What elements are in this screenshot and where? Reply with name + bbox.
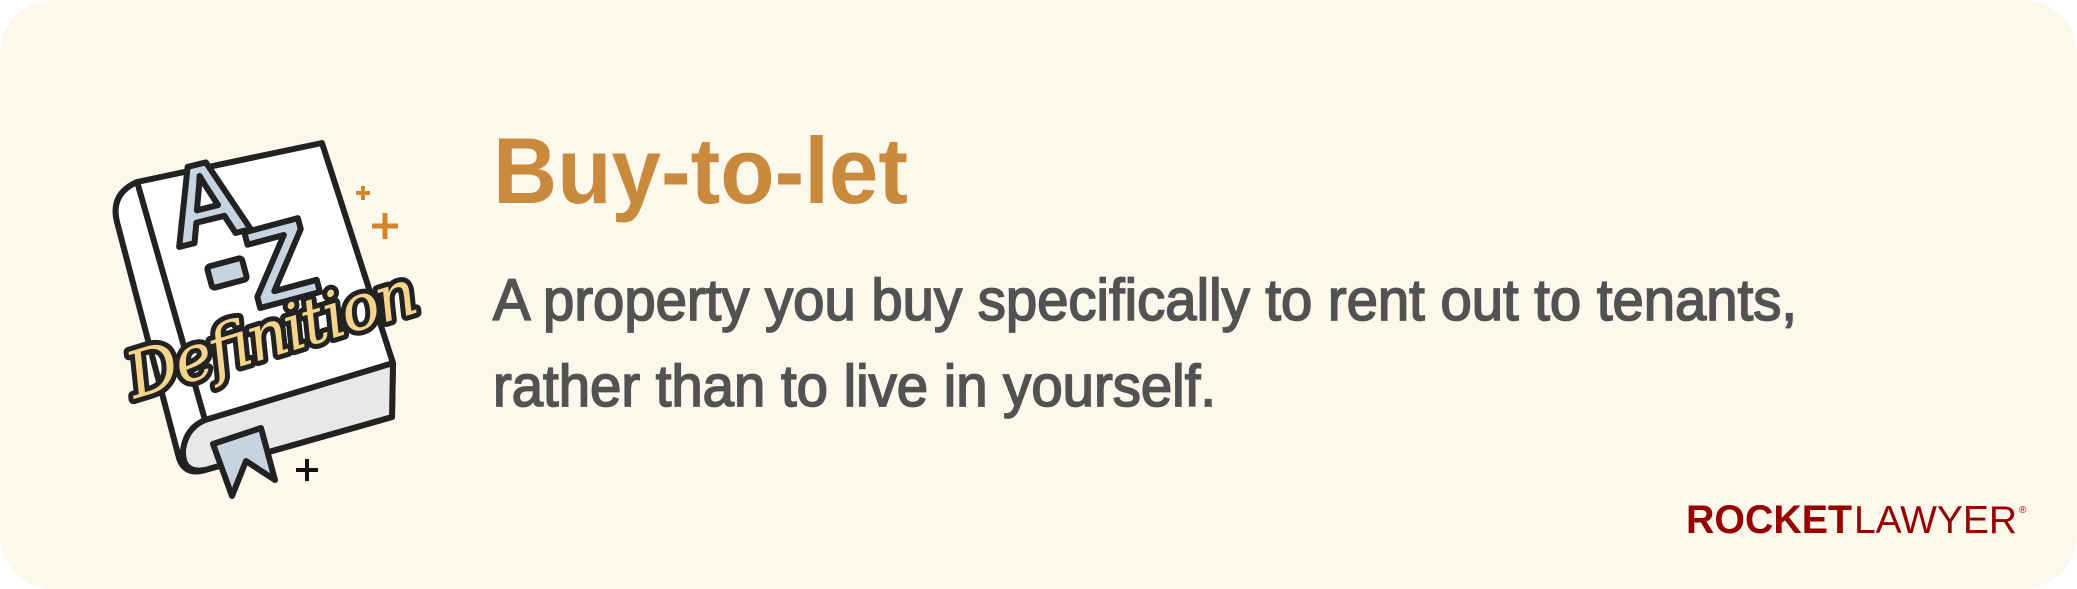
letter Z: Z	[231, 194, 329, 332]
page block	[183, 363, 393, 471]
definition text	[493, 267, 1797, 419]
dash	[207, 258, 247, 288]
letter A: A	[153, 132, 259, 271]
bookmark	[213, 428, 275, 496]
definition text: A property you buy specifically to rent out to tenants,	[493, 267, 1797, 333]
book cover	[116, 143, 393, 472]
sparkles	[296, 186, 398, 481]
logo: Rocket Lawyer: LAWYER	[1854, 499, 2017, 542]
icon: definition book	[116, 132, 393, 496]
spine line	[138, 185, 205, 420]
logo: Rocket Lawyer	[1686, 498, 2027, 542]
definition text: rather than to live in yourself.	[493, 353, 1216, 419]
script word: Definition: Definition	[117, 256, 426, 414]
logo: Rocket Lawyer: ROCKET	[1686, 498, 1852, 542]
logo: Rocket Lawyer: ®	[2019, 505, 2027, 516]
title: Buy-to-let	[493, 118, 908, 223]
